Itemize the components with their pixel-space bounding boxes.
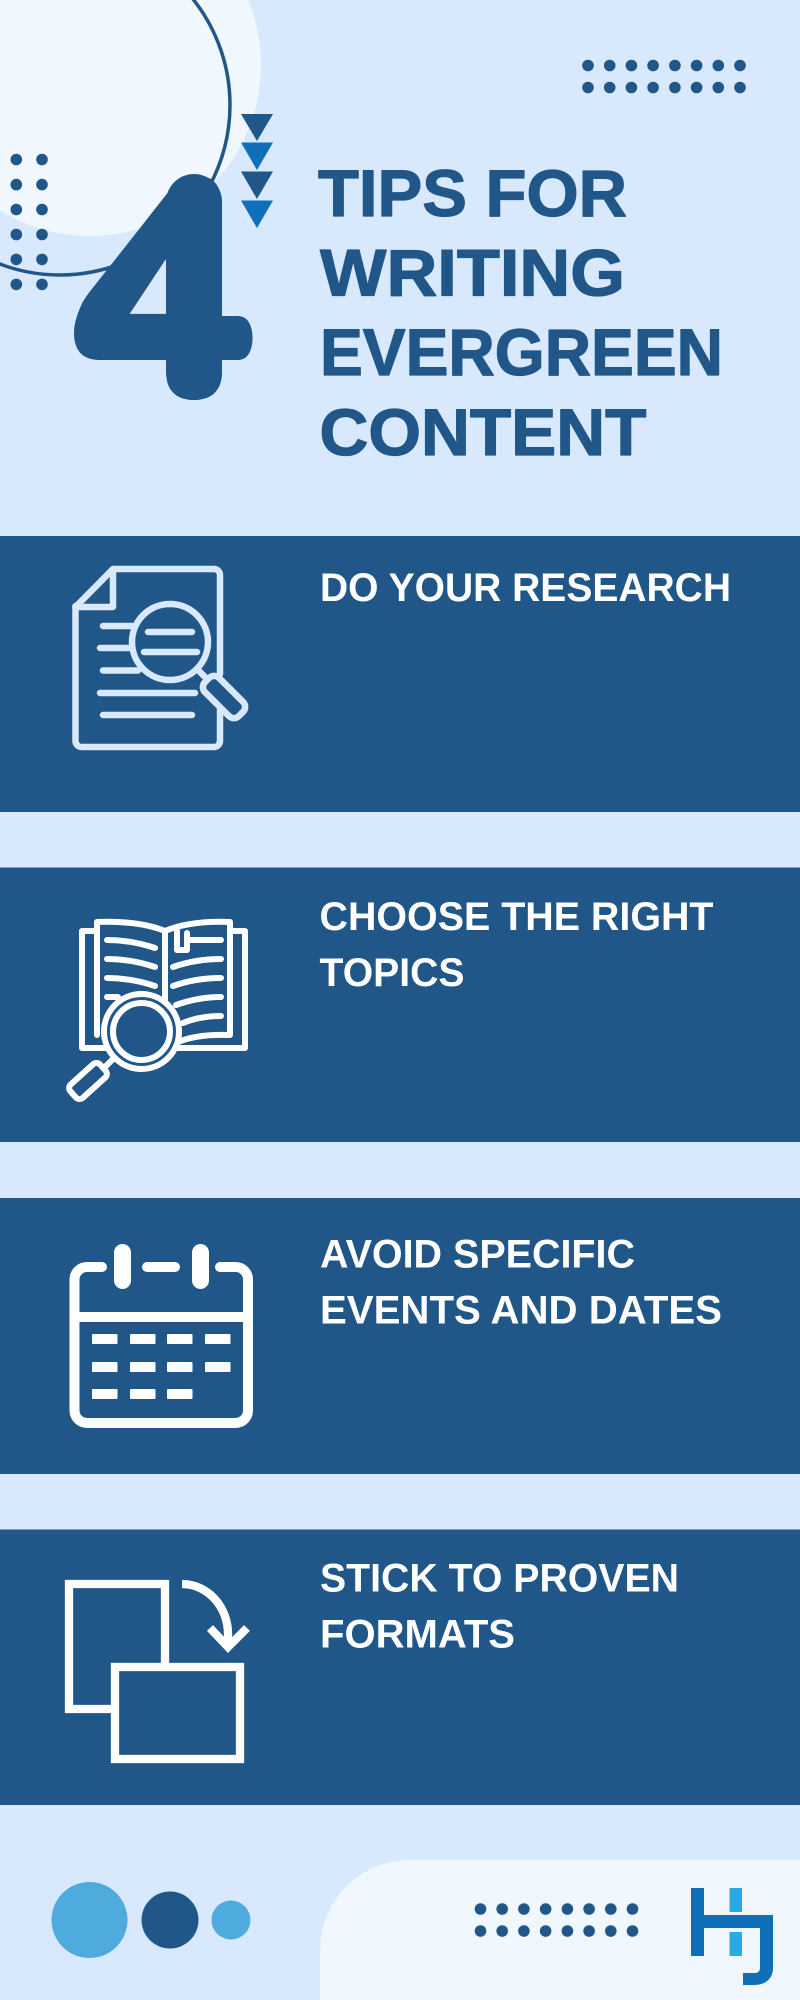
panel: choose the right topics (0, 868, 800, 1142)
title: WRITING (320, 236, 625, 310)
tip text: FORMATS (320, 1612, 515, 1656)
outline circle (0, 0, 230, 275)
tip text (320, 1232, 722, 1332)
title: TIPS FOR (318, 156, 627, 230)
footer pale rounded panel (320, 1860, 800, 2000)
tip text: STICK TO PROVEN (320, 1556, 679, 1600)
panel: avoid specific events and dates (0, 1198, 800, 1474)
dot grid: footer (475, 1903, 638, 1937)
logo: HJ mark (691, 1888, 773, 1985)
icon: document with magnifier (76, 569, 248, 747)
downward triangles (241, 114, 273, 228)
tip text: AVOID SPECIFIC (320, 1232, 635, 1276)
tip text (320, 895, 714, 995)
panel: stick to proven formats (0, 1530, 800, 1805)
panel: do your research (0, 536, 800, 812)
dot grid: left (10, 154, 48, 290)
tip text: EVENTS AND DATES (320, 1288, 722, 1332)
tip text: CHOOSE THE RIGHT (320, 895, 714, 939)
dot grid: top right (582, 60, 746, 93)
tip text: TOPICS (320, 951, 464, 995)
title (318, 156, 723, 469)
icon: two rectangles with arrow (69, 1584, 247, 1759)
tip text (320, 1556, 679, 1656)
tip text: DO YOUR RESEARCH (320, 566, 731, 610)
big number 4: 4 (75, 122, 247, 461)
icon: open book with magnifier (67, 922, 245, 1101)
title: CONTENT (320, 395, 646, 469)
footer circles (52, 1882, 250, 1958)
title: EVERGREEN (320, 315, 723, 389)
pale background circle (0, 0, 261, 236)
icon: calendar (74, 1244, 248, 1423)
big number 4 (74, 174, 252, 400)
